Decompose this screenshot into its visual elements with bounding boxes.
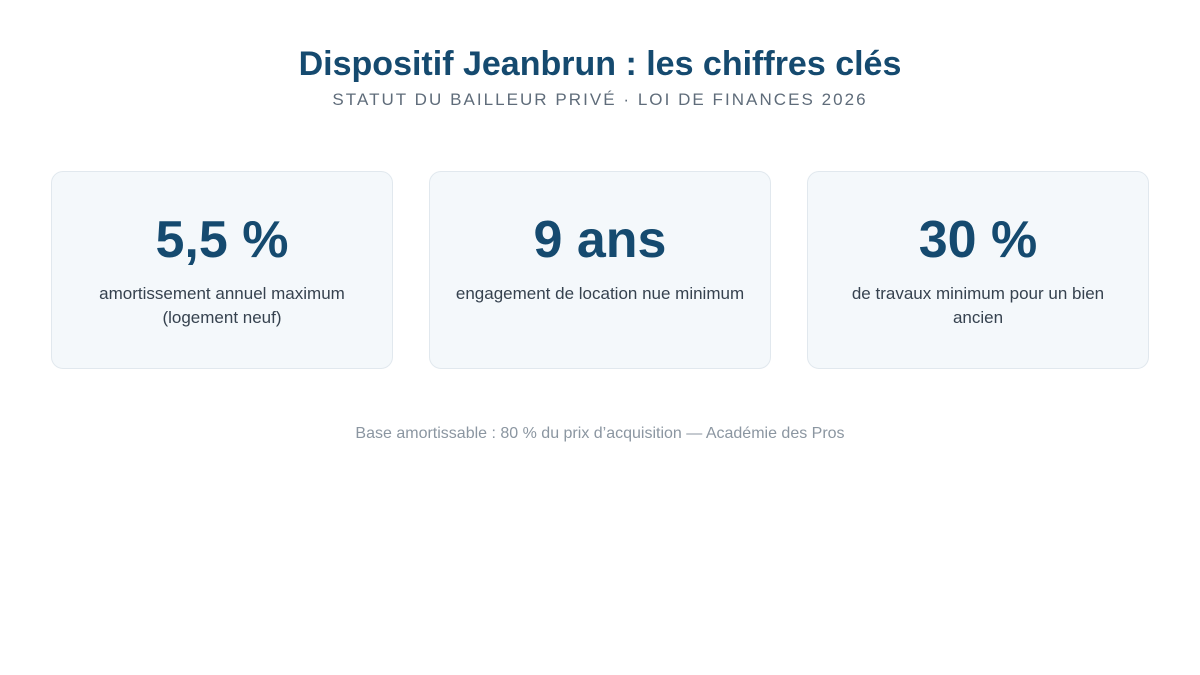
panel: travaux: [807, 171, 1149, 369]
subtitle: STATUT DU BAILLEUR PRIVÉ · LOI DE FINANCES 2026: [332, 90, 868, 109]
stat label: travaux: de travaux minimum pour un bien: [852, 284, 1104, 303]
stat value: 5,5 %: 5,5 %: [156, 211, 288, 269]
panel: amortissement: [51, 171, 393, 369]
stat label: amortissement: (logement neuf): [162, 308, 282, 327]
stat label: engagement: engagement de location nue minimum: [456, 284, 744, 303]
title: Dispositif Jeanbrun : les chiffres clés: [299, 45, 901, 83]
footnote: Base amortissable : 80 % du prix d’acquisition — Académie des Pros: [355, 425, 845, 442]
stat label: amortissement: [99, 284, 345, 327]
stat label: travaux: ancien: [953, 308, 1003, 327]
stat label: amortissement: amortissement annuel maximum: [99, 284, 345, 303]
stat value: 30 %: 30 %: [919, 211, 1037, 269]
panel: engagement: [429, 171, 771, 369]
stat value: 9 ans: 9 ans: [534, 211, 666, 269]
stat label: travaux: [852, 284, 1104, 327]
